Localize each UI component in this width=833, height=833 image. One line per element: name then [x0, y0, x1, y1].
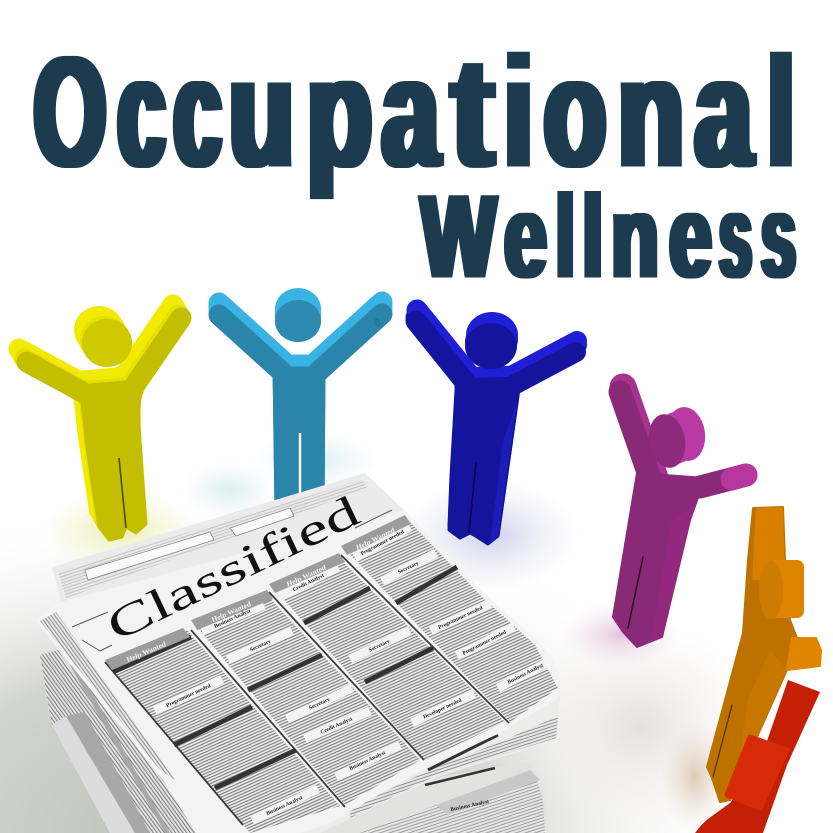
subtitle: Wellness: e	[504, 171, 546, 303]
figure: red person	[695, 680, 820, 833]
white ad-title bands	[155, 527, 554, 820]
Help Wanted headers: Help Wanted	[355, 525, 396, 552]
ad headings: Business Analyst	[266, 795, 304, 817]
title: Occupational: i	[504, 25, 532, 200]
column rules	[105, 555, 509, 825]
Help Wanted headers	[105, 515, 411, 670]
Help Wanted headers: Help Wanted	[125, 639, 167, 664]
subtitle: Wellness: s	[762, 171, 796, 303]
subtitle: Wellness: e	[670, 171, 712, 303]
classified columns	[107, 520, 558, 833]
lower-left folded sheet edges	[40, 650, 175, 833]
ad headings: Programmer needed	[462, 629, 507, 657]
subtitle: Wellness	[421, 171, 796, 303]
title: Occupational: a	[695, 25, 753, 200]
figure: light-blue person	[219, 288, 382, 510]
newspaper stack	[35, 473, 561, 833]
back newspaper sheet	[52, 473, 404, 622]
left folded edge text	[40, 612, 175, 780]
ad headings: Secretary	[397, 560, 420, 576]
title: Occupational	[34, 25, 794, 200]
ad headings: Developer needed	[422, 698, 463, 721]
masthead rules	[72, 510, 392, 651]
subtitle: Wellness: n	[612, 171, 658, 303]
third sheet on right	[290, 762, 547, 833]
title: Occupational: l	[768, 25, 794, 200]
ad headings: Secretary	[249, 639, 272, 653]
title: Occupational: o	[544, 25, 606, 200]
second sheet on right	[270, 697, 560, 833]
Help Wanted headers: Help Wanted	[285, 563, 327, 589]
ad headings: Programmer needed	[165, 683, 212, 709]
title: Occupational: O	[34, 25, 106, 200]
ad headings	[165, 529, 545, 817]
figure: yellow person	[19, 305, 181, 540]
ad headings: Business Analyst	[349, 750, 387, 772]
title: Occupational: a	[382, 25, 440, 200]
dark section bars	[113, 567, 457, 788]
ad headings: Programmer needed	[437, 605, 484, 631]
figure: orange person	[707, 507, 821, 802]
title: Occupational: c	[118, 25, 165, 200]
title: Occupational: t	[451, 25, 494, 200]
ad headings: Business Analyst	[507, 662, 545, 686]
ad headings: Business Analyst	[213, 608, 252, 630]
ad headings: Secretary	[368, 639, 391, 654]
newspaper stack: Business Analyst	[450, 799, 490, 813]
subtitle: Wellness: W	[421, 171, 496, 303]
Help Wanted headers: Help Wanted	[210, 599, 252, 624]
front newspaper page	[35, 510, 561, 833]
title: Occupational: p	[307, 25, 372, 200]
figure: blue person	[416, 310, 577, 544]
ad headings: Credit Analyst	[292, 573, 325, 593]
masthead: Classified: Classified	[100, 487, 368, 651]
subtitle: Wellness: s	[720, 171, 752, 303]
ad headings: Secretary	[308, 697, 331, 711]
subtitle: Wellness: l	[583, 171, 602, 303]
figure: magenta person	[613, 387, 746, 647]
ad headings: Credit Analyst	[320, 716, 354, 736]
title: Occupational: u	[229, 25, 294, 200]
title: Occupational: n	[618, 25, 684, 200]
subtitle: Wellness: l	[556, 171, 574, 303]
title: Occupational: c	[174, 25, 221, 200]
ad headings: Programmer needed	[360, 529, 405, 557]
